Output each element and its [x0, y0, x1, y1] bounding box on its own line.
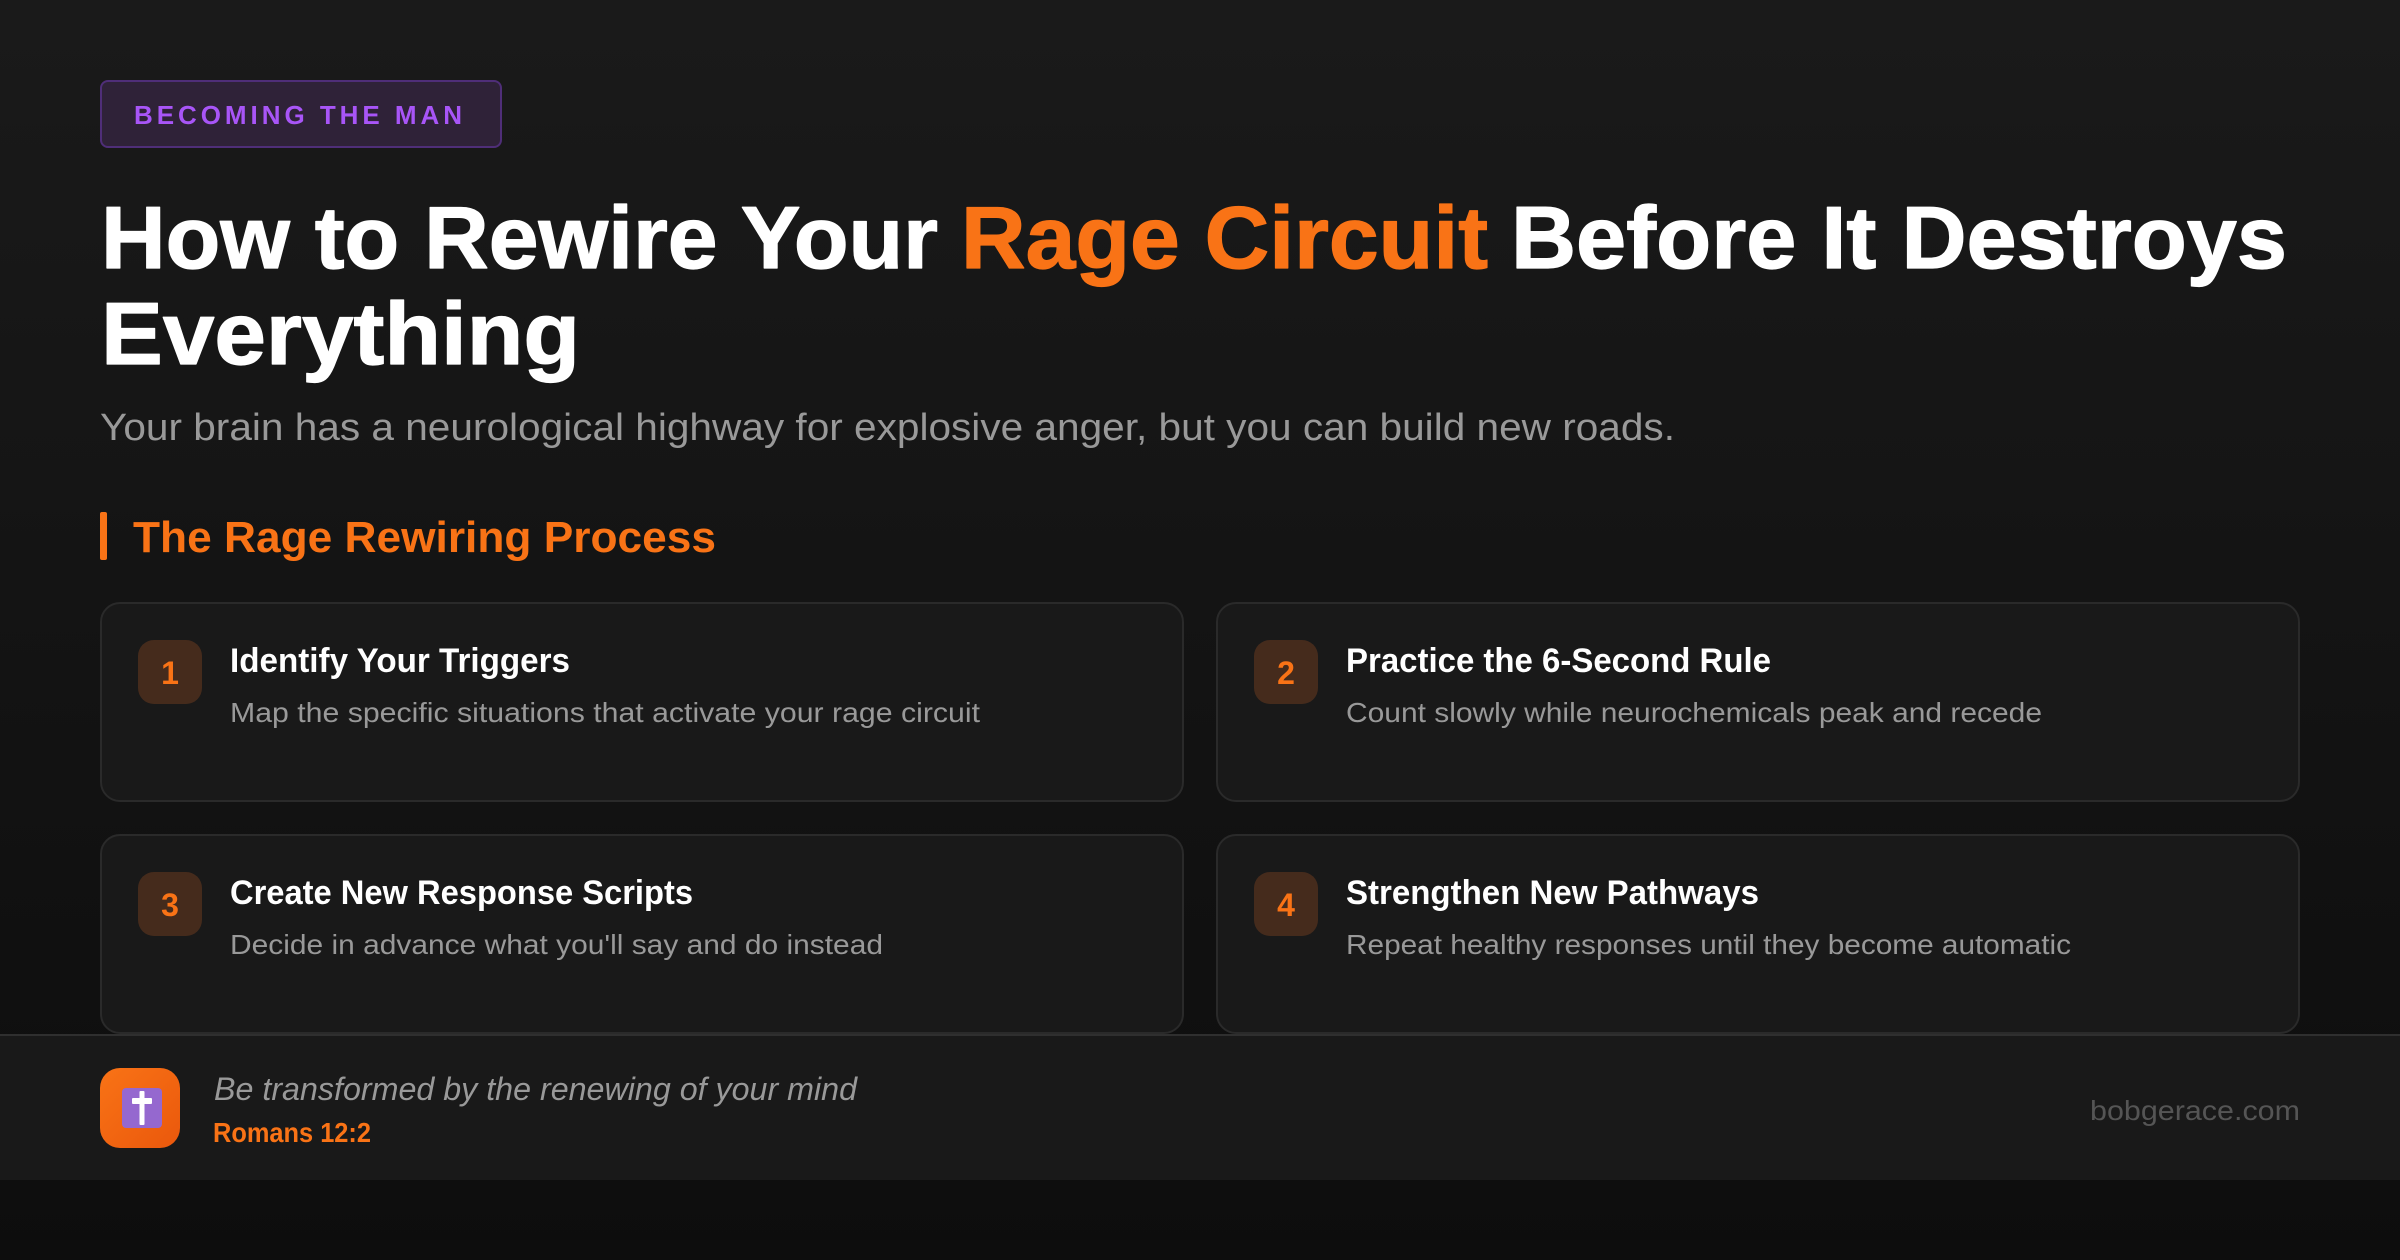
- card 4: strengthen new pathways: 4: [1277, 887, 1295, 923]
- title: How to Rewire Your: [101, 188, 938, 287]
- card 1: identify your triggers: Identify Your Triggers: [230, 642, 570, 680]
- card 3: create new response scripts: [101, 835, 1183, 1033]
- title: Before It Destroys: [1511, 188, 2287, 287]
- card 3: create new response scripts: Create New Response Scripts: [230, 874, 693, 912]
- card 2: practice the 6-second rule: Practice the 6-Second Rule: [1346, 642, 1771, 680]
- card 4: strengthen new pathways: Strengthen New Pathways: [1346, 874, 1759, 912]
- card 2: practice the 6-second rule: [1217, 603, 2299, 801]
- title: Everything: [101, 284, 580, 383]
- badge: becoming the man: BECOMING THE MAN: [134, 100, 462, 130]
- section heading: the rage rewiring process: The Rage Rewiring Process: [133, 513, 716, 562]
- card 1: identify your triggers: Map the specific situations that activate your rage circuit: [230, 697, 980, 728]
- card 2: practice the 6-second rule: Count slowly while neurochemicals peak and recede: [1346, 697, 2042, 728]
- card 1: identify your triggers: 1: [161, 655, 179, 691]
- icon: cross: [100, 1068, 180, 1148]
- scripture quote: Be transformed by the renewing of your mind: [214, 1071, 858, 1107]
- card 1: identify your triggers: [101, 603, 1183, 801]
- title: [101, 188, 2287, 383]
- title: Rage Circuit: [961, 188, 1488, 287]
- card 3: create new response scripts: 3: [161, 887, 179, 923]
- footer: [0, 1034, 2400, 1180]
- card 4: strengthen new pathways: Repeat healthy responses until they become automatic: [1346, 929, 2071, 960]
- website: bobgerace.com: [2090, 1095, 2300, 1126]
- card 3: create new response scripts: Decide in advance what you'll say and do instead: [230, 929, 883, 960]
- badge: becoming the man: [101, 81, 501, 147]
- card 2: practice the 6-second rule: 2: [1277, 655, 1295, 691]
- subtitle: Your brain has a neurological highway for explosive anger, but you can build new roads.: [100, 407, 1675, 449]
- card 4: strengthen new pathways: [1217, 835, 2299, 1033]
- scripture reference: Romans 12:2: [213, 1117, 371, 1148]
